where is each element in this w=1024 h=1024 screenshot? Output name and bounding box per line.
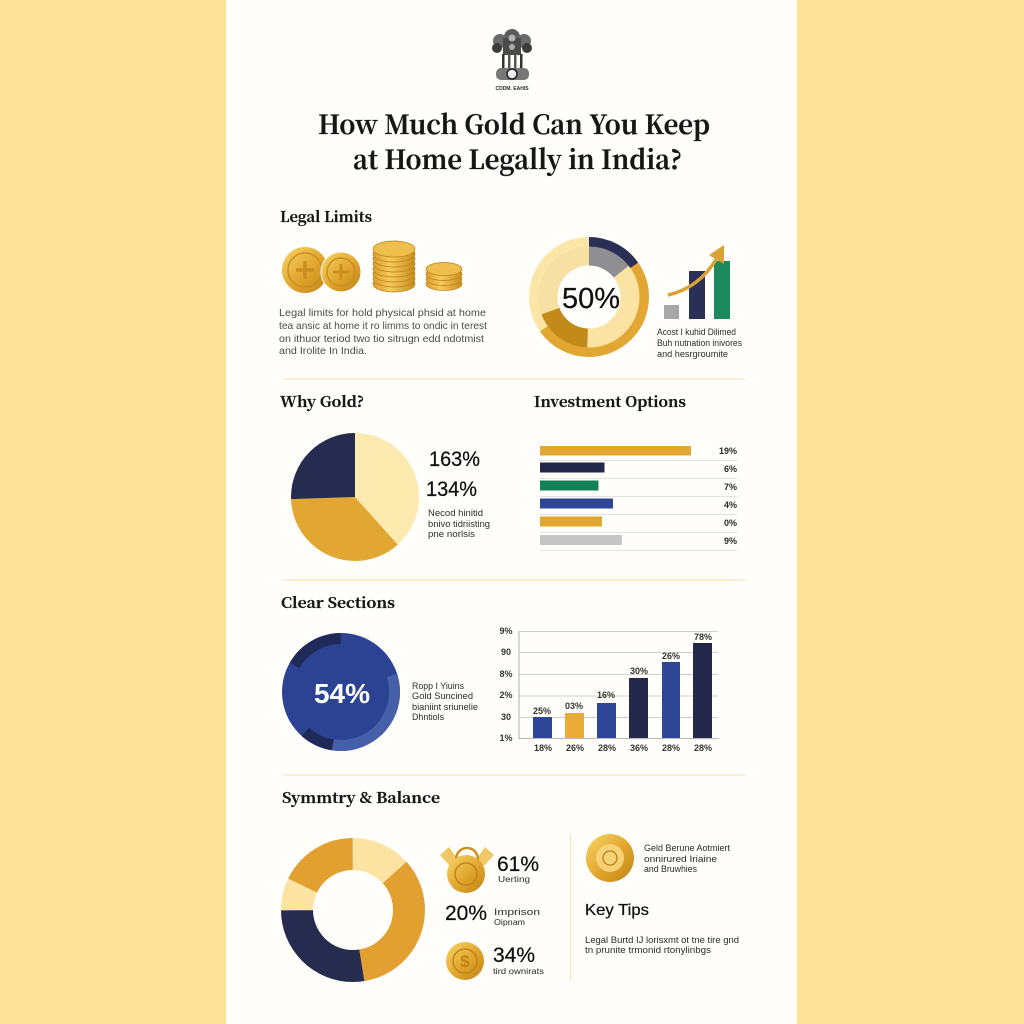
text: legal limits description [279, 307, 487, 357]
icon: gold round badge [586, 834, 634, 882]
icon: dollar coin [446, 942, 484, 980]
chart: rising bars with arrow [664, 245, 730, 319]
chart: vertical bars: 30% [630, 666, 648, 676]
text: dial caption: Ropp I Yiuins [412, 681, 464, 691]
chart: vertical bars: 25% [533, 706, 551, 716]
stat: 134%: 134% [426, 478, 477, 501]
stat: 163%: 163% [429, 448, 480, 471]
text: chart caption [657, 327, 742, 359]
chart: vertical bars: 28% [662, 743, 680, 753]
heading: why gold: Why Gold? [280, 391, 364, 412]
heading: investment options: Investment Options [534, 391, 686, 412]
icon: national emblem: CDDM. EAHIS [495, 86, 529, 92]
chart: horizontal bars: 0% [724, 518, 737, 528]
chart: horizontal bars: 4% [724, 500, 737, 510]
text: key tips description [585, 935, 739, 955]
section: legal limits [279, 206, 742, 359]
stat: 34% [493, 944, 544, 976]
chart: vertical bars: 8% [499, 669, 513, 679]
text: legal limits description: tea ansic at home it ro limms to ondic in terest [279, 320, 487, 332]
icon: gold medal with ribbons [440, 847, 494, 893]
text: pie caption: Necod hinitid [428, 508, 483, 518]
text: legal limits description: Legal limits for hold physical phsid at home [279, 307, 486, 319]
chart: vertical bars: 36% [630, 743, 648, 753]
text: pie caption: pne norlsis [428, 529, 476, 539]
chart: pie [323, 465, 387, 529]
heading: symmetry and balance: Symmtry & Balance [282, 787, 440, 808]
text: key tips description: tn prunite trmonid rtonylinbgs [585, 945, 712, 955]
chart: horizontal bars: 19% [719, 446, 737, 456]
icon: short coin stack [426, 262, 462, 290]
title [318, 103, 710, 177]
stat: 61%: 61% [497, 853, 539, 876]
text: badge caption: and Bruwhies [644, 864, 697, 874]
chart: 50% donut: 50% [562, 283, 620, 315]
chart: vertical bars: 18% [534, 743, 552, 753]
stat: 20% [445, 902, 540, 927]
text: legal limits description: and Irolite In India. [279, 345, 367, 357]
chart: vertical bars: 16% [597, 690, 615, 700]
title: at Home Legally in India? [353, 138, 682, 177]
heading: legal limits: Legal Limits [280, 206, 372, 227]
text: chart caption: and hesrgroumite [657, 349, 728, 359]
text: key tips description: Legal Burtd IJ lorisxmt ot tne tire gnd [585, 935, 739, 945]
chart: vertical bars: 28% [598, 743, 616, 753]
stat: 61%: Uerting [498, 874, 530, 884]
chart: 50% donut [534, 242, 644, 352]
section: symmetry and balance [282, 787, 544, 980]
text: chart caption: Acost I kuhid Dilimed [657, 327, 736, 337]
chart: vertical bars: 90 [501, 647, 511, 657]
icon: gold coins [282, 247, 361, 293]
chart: vertical bars: 78% [694, 632, 712, 642]
chart: horizontal bars [540, 446, 737, 550]
chart: balance donut [297, 854, 409, 966]
title: How Much Gold Can You Keep [318, 103, 710, 142]
text: dial caption [412, 681, 478, 722]
text: dial caption: Dhntiols [412, 712, 444, 722]
text: badge caption: onnirured Iriaine [644, 854, 717, 864]
stat: 34%: tird ownirats [493, 966, 544, 976]
chart: vertical bars: 1% [499, 733, 513, 743]
icon: national emblem [492, 29, 532, 92]
text: legal limits description: on ithuor teriod two tio sitrugn edd ndotmist [279, 333, 484, 345]
chart: vertical bars: 30 [501, 712, 511, 722]
text: badge caption [644, 843, 730, 874]
section: key tips [585, 834, 739, 955]
chart: vertical bars: 03% [565, 701, 583, 711]
chart: vertical bars: 26% [662, 651, 680, 661]
chart: 54% blue dial [282, 633, 400, 751]
chart: horizontal bars: 6% [724, 464, 737, 474]
chart: vertical bars: 26% [566, 743, 584, 753]
icon: dollar coin: $ [460, 952, 470, 971]
text: dial caption: Gold Suncined [412, 691, 473, 701]
section: why gold [280, 391, 490, 539]
chart: vertical bars: 9% [499, 626, 513, 636]
stat: 20%: 20% [445, 902, 487, 925]
central white panel [226, 0, 797, 1024]
icon: tall coin stack [373, 241, 415, 292]
text: badge caption: Geld Berune Aotmiert [644, 843, 730, 853]
text: pie caption: bnivo tidriisting [428, 519, 490, 529]
text: dial caption: bianiint sriunelie [412, 702, 478, 712]
chart: vertical bars [499, 626, 719, 753]
stat: 20%: Imprison [494, 907, 540, 917]
heading: clear sections: Clear Sections [281, 592, 395, 613]
text: chart caption: Buh nutnation inivores [657, 338, 742, 348]
chart: horizontal bars: 7% [724, 482, 737, 492]
text: pie caption [428, 508, 490, 539]
chart: horizontal bars: 9% [724, 536, 737, 546]
stat: 34%: 34% [493, 944, 535, 967]
chart: vertical bars: 28% [694, 743, 712, 753]
section: investment options [534, 391, 737, 550]
chart: 54% blue dial: 54% [314, 678, 370, 709]
chart: vertical bars: 2% [499, 690, 513, 700]
stat: 20%: Oipnam [494, 917, 525, 927]
section: clear sections [281, 592, 478, 751]
heading: key tips: Key Tips [585, 902, 649, 919]
